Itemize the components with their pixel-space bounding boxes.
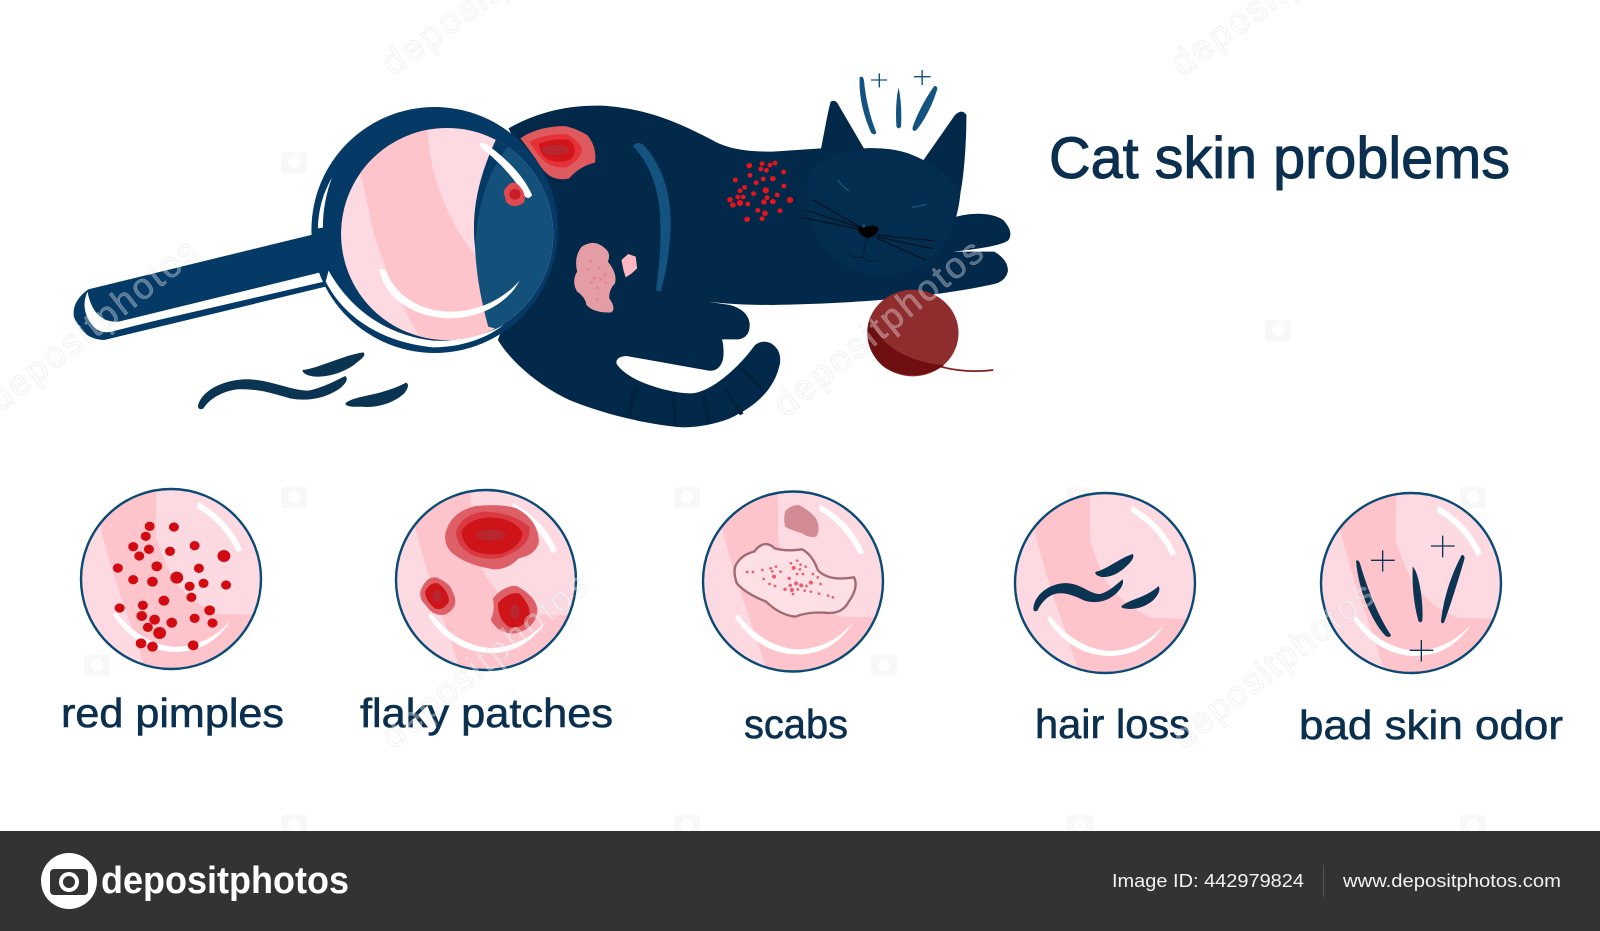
footer bar bbox=[0, 831, 1600, 931]
red pimples on cat bbox=[727, 161, 793, 222]
label: bad skin odor bbox=[1299, 702, 1563, 748]
panel: hair loss bbox=[1014, 488, 1200, 747]
watermarks: depositphotos bbox=[765, 231, 991, 424]
lens skin tone bbox=[360, 130, 554, 340]
skin disc bbox=[1014, 488, 1200, 678]
lens ring bbox=[311, 107, 558, 353]
wounds bbox=[420, 505, 539, 633]
panel: bad skin odor bbox=[1299, 488, 1563, 748]
magnifying glass bbox=[74, 107, 561, 353]
cat body bbox=[498, 101, 1010, 427]
label: red pimples bbox=[61, 690, 284, 736]
panel: red pimples bbox=[61, 484, 284, 736]
hair tufts bbox=[1033, 554, 1159, 611]
skin disc bbox=[1320, 488, 1506, 678]
hair tufts on the floor bbox=[198, 352, 408, 409]
skin disc bbox=[702, 486, 888, 676]
skin disc bbox=[80, 484, 266, 674]
watermarks: depositphotos bbox=[1164, 573, 1382, 756]
image id: Image ID: 442979824 bbox=[1112, 871, 1304, 891]
camera watermark marks bbox=[84, 152, 1486, 836]
label: hair loss bbox=[1035, 701, 1190, 747]
label: flaky patches bbox=[360, 690, 613, 736]
label: scabs bbox=[744, 701, 848, 747]
yarn ball bbox=[867, 290, 993, 376]
panel: flaky patches bbox=[360, 485, 613, 736]
odor lines and sparkles bbox=[1356, 536, 1465, 662]
panel: scabs bbox=[702, 486, 888, 747]
watermarks bbox=[0, 0, 1393, 756]
cat face bbox=[801, 181, 934, 261]
cat spine highlight bbox=[633, 143, 671, 291]
logo icon: camera bbox=[41, 853, 97, 909]
wound on back bbox=[520, 126, 595, 179]
lens glare bbox=[480, 143, 532, 198]
odor lines above head bbox=[860, 70, 937, 134]
title: Cat skin problems bbox=[1049, 126, 1510, 191]
pimples bbox=[113, 522, 231, 652]
handle bbox=[74, 233, 347, 330]
scab marks bbox=[735, 505, 856, 617]
skin disc bbox=[395, 485, 581, 675]
flaky patch on flank bbox=[574, 243, 637, 312]
illustration: cat with magnifier bbox=[74, 70, 1010, 427]
website: www.depositphotos.com bbox=[1342, 871, 1561, 891]
watermarks: depositphotos bbox=[372, 564, 596, 756]
logo wordmark: depositphotos bbox=[101, 860, 349, 902]
